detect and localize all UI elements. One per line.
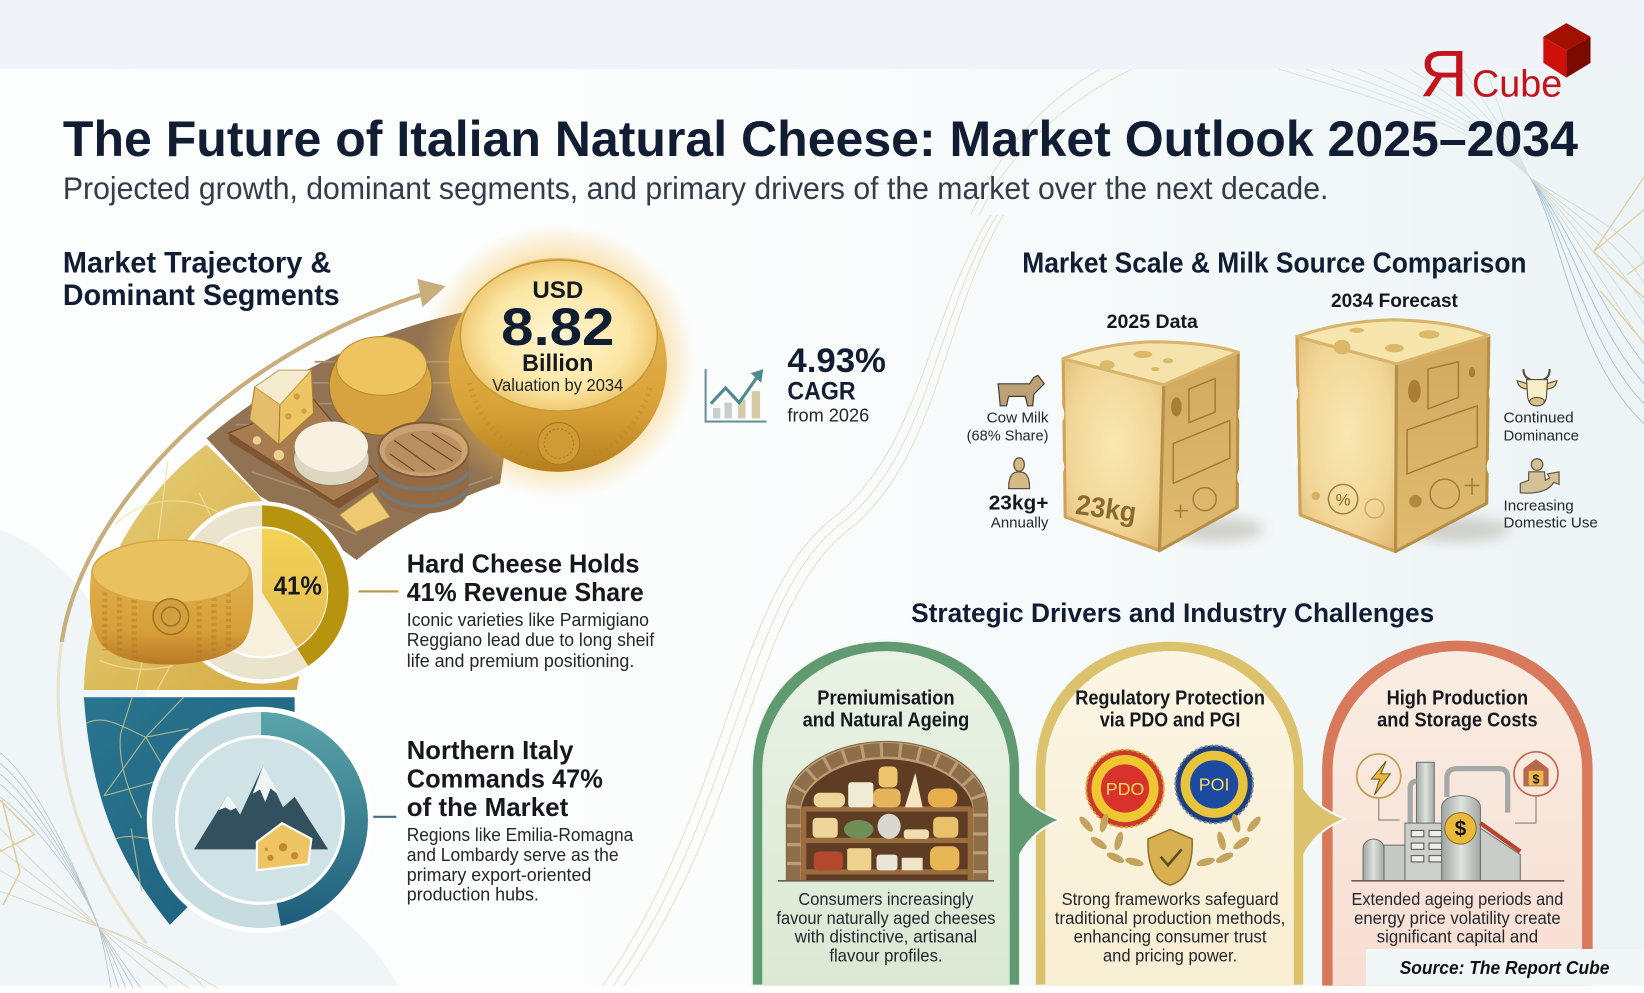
text: hard cheese: Reggiano lead due to long sheif — [407, 629, 655, 650]
barrel — [378, 423, 469, 514]
cutting board — [229, 400, 378, 509]
stamp — [538, 423, 580, 465]
cow milk label — [967, 375, 1049, 444]
text: hard cheese: 41% Revenue Share — [407, 577, 644, 607]
icon: energy bolt — [1357, 754, 1401, 798]
CAGR stat — [706, 342, 886, 426]
icon: factory — [1351, 762, 1564, 881]
cheese: round yellow — [329, 337, 432, 435]
subtitle: Projected growth, dominant segments, and primary drivers of the market over the next decade. — [63, 171, 1328, 206]
gold backdrop — [84, 445, 315, 690]
big cheese wheel valuation — [419, 223, 696, 500]
text: northern italy: primary export-oriented — [407, 864, 591, 885]
per capita label: Annually — [991, 514, 1049, 531]
title: The Future of Italian Natural Cheese: Market Outlook 2025–2034 — [63, 110, 1578, 167]
icon: storage cost: $ — [1533, 772, 1540, 786]
continued dominance label: Continued — [1504, 410, 1574, 427]
text: regulatory: and pricing power. — [1103, 946, 1237, 966]
text: premiumisation: flavour profiles. — [829, 946, 943, 966]
logo: RCube: Cube — [1472, 62, 1562, 104]
text: hard cheese — [407, 549, 655, 671]
card: premiumisation — [752, 641, 1060, 986]
source box — [1366, 949, 1644, 986]
text: premiumisation: Consumers increasingly — [798, 889, 974, 909]
icon: ageing cellar — [778, 741, 994, 881]
domestic use label — [1504, 459, 1598, 531]
text: hard cheese: Hard Cheese Holds — [407, 549, 640, 579]
teal backdrop — [84, 697, 295, 925]
seal: PDO — [1086, 750, 1164, 827]
icon: rising consumer — [1520, 459, 1559, 493]
text: hard cheese: Iconic varieties like Parmigiano — [407, 609, 649, 630]
card: high production costs: and Storage Costs — [1377, 709, 1538, 732]
continued dominance label: Dominance — [1504, 427, 1579, 444]
source box: Source: The Report Cube — [1400, 957, 1609, 978]
icon: cow — [998, 375, 1044, 406]
CAGR stat: 4.93% — [787, 342, 886, 380]
text: costs: energy price volatility create — [1354, 908, 1561, 928]
big cheese wheel valuation: Billion — [522, 350, 593, 377]
text: northern italy: and Lombardy serve as the — [407, 844, 619, 865]
cheese block 2034 — [1292, 290, 1510, 552]
cheese: round white — [294, 422, 369, 485]
text: regulatory: enhancing consumer trust — [1074, 927, 1267, 947]
icon: shield — [1148, 829, 1192, 885]
CAGR stat: from 2026 — [787, 405, 869, 426]
cheese block 2034: 2034 Forecast — [1331, 290, 1458, 312]
text: costs: significant capital and — [1377, 927, 1538, 947]
icon: cow head — [1517, 369, 1557, 406]
segment: northern italy — [84, 697, 634, 933]
text: regulatory: traditional production methods, — [1055, 908, 1285, 928]
per capita label — [989, 458, 1049, 531]
text: northern italy: of the Market — [407, 792, 569, 822]
seal: PGI — [1175, 746, 1253, 823]
icon: growth chart — [706, 369, 766, 422]
text: northern italy — [407, 735, 634, 905]
segment: hard cheese: 41% — [274, 571, 322, 601]
cow milk label: (68% Share) — [967, 427, 1048, 444]
wooden cheese band — [207, 311, 524, 560]
text: northern italy: production hubs. — [407, 884, 539, 905]
text: northern italy: Regions like Emilia-Romagna — [407, 824, 634, 845]
text: regulatory — [1055, 889, 1285, 966]
CAGR stat: CAGR — [787, 378, 856, 406]
logo cube — [1543, 23, 1591, 78]
card: premiumisation: and Natural Ageing — [803, 709, 969, 732]
donut 41 percent — [171, 501, 353, 684]
icon: factory: $ — [1455, 818, 1467, 841]
arrow: growth trajectory — [58, 279, 446, 944]
text: northern italy: Northern Italy — [407, 735, 574, 765]
domestic use label: Increasing — [1504, 498, 1574, 515]
text: costs — [1351, 889, 1563, 947]
card: regulatory protection: via PDO and PGI — [1100, 709, 1240, 732]
seal: PDO: PDO — [1106, 779, 1144, 799]
small wedge — [340, 492, 390, 532]
cheese block 2025 — [1058, 311, 1263, 551]
cheese wheel — [90, 540, 253, 665]
card: regulatory protection: Regulatory Protection — [1075, 687, 1265, 710]
logo: RCube — [1420, 23, 1591, 110]
continued dominance label — [1504, 369, 1579, 444]
text: costs: Extended ageing periods and — [1351, 889, 1563, 909]
per capita label: 23kg+ — [989, 493, 1048, 515]
text: premiumisation: favour naturally aged cheeses — [776, 908, 996, 928]
cheese block 2025: 2025 Data — [1107, 311, 1198, 333]
text: northern italy: Commands 47% — [407, 763, 603, 793]
card: regulatory protection — [1035, 641, 1345, 986]
card: premiumisation: Premiumisation — [817, 687, 955, 710]
heading: market trajectory: Dominant Segments — [63, 279, 340, 312]
cheese: wedge — [250, 370, 313, 445]
cow milk label: Cow Milk — [987, 410, 1049, 427]
heading: market trajectory: Market Trajectory & — [63, 247, 331, 280]
big cheese wheel valuation: USD — [532, 277, 583, 304]
heading: market trajectory — [63, 247, 340, 312]
big cheese wheel valuation: Valuation by 2034 — [492, 375, 624, 395]
logo: RCube: Я — [1420, 36, 1468, 110]
text: premiumisation — [776, 889, 996, 966]
heading: strategic drivers: Strategic Drivers and Industry Challenges — [911, 597, 1434, 628]
icon: storage cost — [1514, 752, 1558, 796]
cheese block 2025: 23kg — [1074, 488, 1139, 528]
text: hard cheese: life and premium positioning. — [407, 650, 634, 671]
cheese shelf items — [813, 767, 959, 870]
icon: mountains and cheese — [194, 765, 328, 870]
laurels — [1077, 813, 1263, 868]
text: premiumisation: with distinctive, artisanal — [794, 927, 977, 947]
cheese block 2034: % — [1336, 490, 1351, 509]
domestic use label: Domestic Use — [1504, 514, 1598, 531]
heading: market scale: Market Scale & Milk Source Comparison — [1022, 247, 1527, 279]
segment: hard cheese — [84, 445, 655, 690]
text: regulatory: Strong frameworks safeguard — [1062, 889, 1279, 909]
card: high production costs: High Production — [1387, 687, 1528, 710]
card: high production costs — [1322, 641, 1593, 986]
icon: person — [1009, 458, 1030, 489]
seal: PGI: POI — [1199, 775, 1229, 795]
big cheese wheel valuation: 8.82 — [501, 299, 614, 357]
donut 47 percent — [147, 707, 373, 933]
